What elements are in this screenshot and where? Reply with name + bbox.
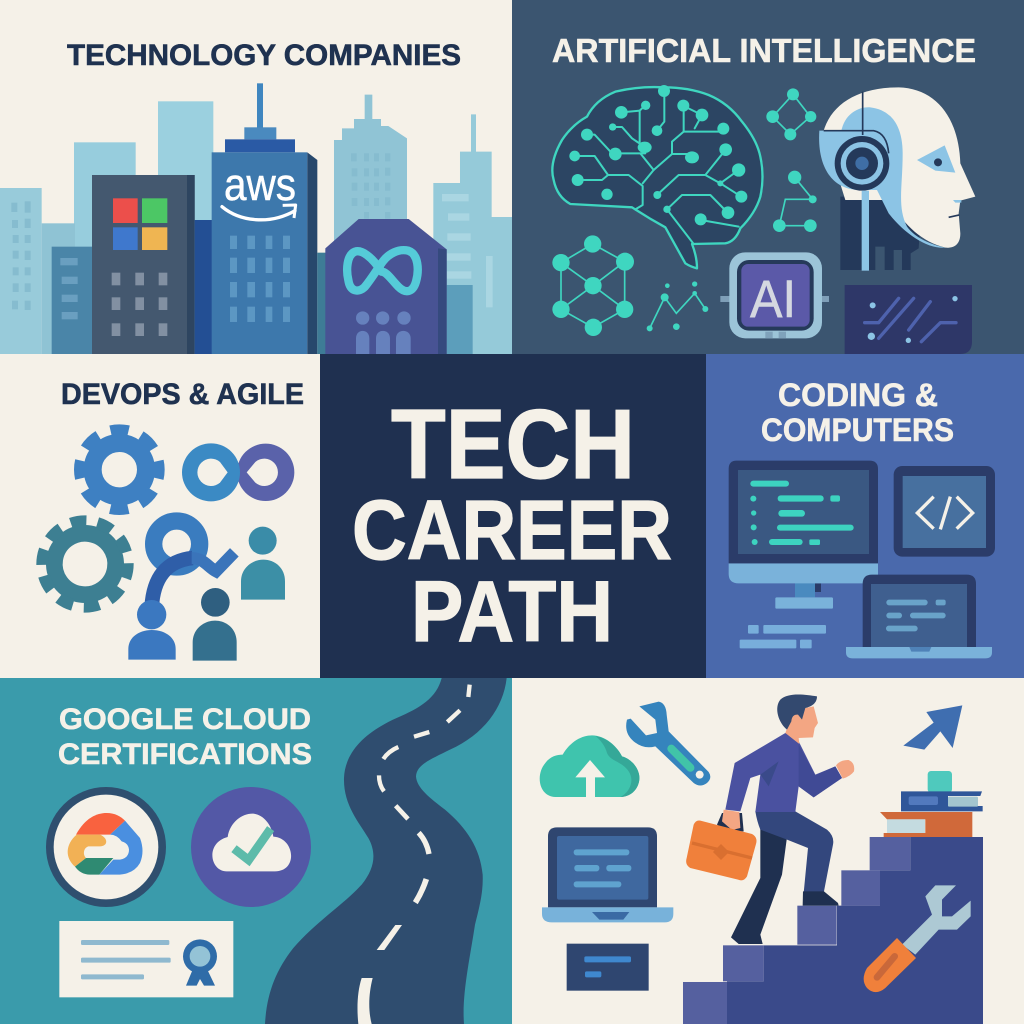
icon: code window (894, 466, 995, 557)
heading: coding and computers: CODING & (778, 377, 938, 413)
heading: google cloud certifications: GOOGLE CLOUD (59, 703, 311, 736)
chip label: AI: AI (750, 270, 796, 329)
panel: google cloud certifications (0, 678, 512, 1024)
icon: screwdriver wrench (864, 885, 971, 992)
icon: orange briefcase (686, 820, 756, 880)
icon: code lines (740, 625, 826, 648)
icon: small network nodes (561, 94, 813, 328)
illustration: circuit brain (552, 85, 975, 354)
illustration: devices (729, 461, 995, 658)
heading: coding and computers (761, 377, 954, 448)
illustration: city skyline (0, 83, 512, 354)
panel: devops and agile (0, 354, 320, 678)
heading: artificial intelligence: ARTIFICIAL INTELLIGENCE (552, 32, 976, 69)
icon: upload cloud (540, 735, 639, 797)
icon: AI chip (720, 252, 829, 338)
panel: main title (320, 354, 706, 678)
icon: laptop (542, 827, 673, 922)
panel: artificial intelligence (512, 0, 1024, 354)
icon: teal gear (36, 515, 134, 613)
icon: circuit board (845, 285, 972, 354)
panel: climbing the career stairs (512, 678, 1024, 1024)
figure: climbing professional (686, 694, 854, 944)
icon: book stack (880, 771, 983, 837)
illustration: gears, loop and team (36, 430, 294, 661)
icon: staircase (683, 837, 983, 1024)
icon: cloud check badge (191, 787, 311, 907)
logo text: aws: aws (224, 159, 296, 210)
icon: blue gear (80, 430, 159, 509)
icon: infinity loop (182, 443, 294, 501)
title: path: PATH (411, 564, 613, 660)
heading: google cloud certifications: CERTIFICATIONS (58, 738, 312, 771)
icon: document card (567, 944, 649, 991)
heading: devops and agile: DEVOPS & AGILE (61, 378, 304, 411)
icon: google cloud badge (46, 787, 166, 907)
icon: laptop (846, 575, 992, 658)
icon: growth arrow (903, 705, 962, 750)
icon: team members (128, 527, 285, 661)
heading: technology companies: TECHNOLOGY COMPANIES (67, 39, 461, 72)
title: tech: TECH (391, 389, 635, 499)
heading: coding and computers: COMPUTERS (761, 412, 954, 448)
icon: blue wrench (626, 702, 710, 785)
title: career: CAREER (352, 483, 672, 577)
panel: coding and computers (706, 354, 1024, 678)
illustration: winding road (265, 678, 507, 1024)
icon: workflow arrow (152, 521, 234, 607)
heading: google cloud certifications (58, 703, 312, 771)
icon: certificate (59, 921, 233, 997)
panel: technology companies (0, 0, 512, 354)
icon: desktop monitor (729, 461, 878, 609)
illustration: robot head (819, 87, 975, 271)
